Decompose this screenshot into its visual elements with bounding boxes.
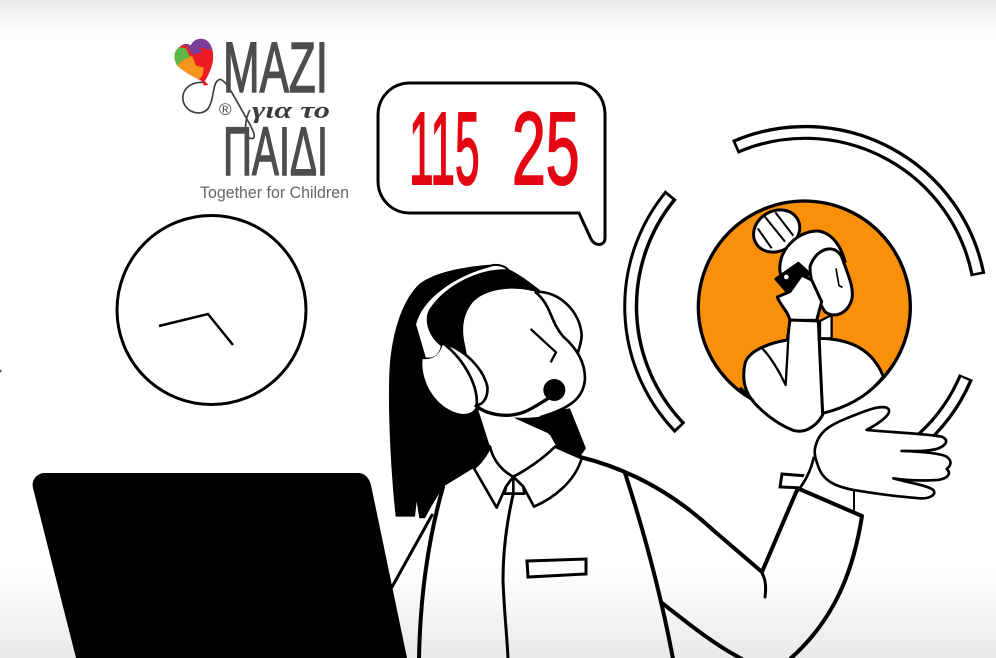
ring arc: top right <box>735 132 978 275</box>
far ear pad <box>537 292 582 354</box>
ring arc: left <box>631 195 680 428</box>
orange disc <box>698 201 910 413</box>
laptop <box>33 473 407 658</box>
caller torso <box>818 338 883 413</box>
agent outlines <box>392 457 797 658</box>
caller hand <box>777 275 822 320</box>
agent neck <box>478 410 555 477</box>
agent gesturing hand <box>796 407 950 657</box>
logo script: για το <box>252 98 330 124</box>
headset band <box>415 265 509 359</box>
logo tagline: Together for Children <box>200 184 349 202</box>
phone <box>776 263 809 295</box>
microphone boom <box>475 398 548 415</box>
helpline number: 25 <box>512 90 580 206</box>
caller eye <box>836 268 843 287</box>
call-centre agent <box>389 264 862 658</box>
caller arm <box>744 320 823 431</box>
watch strap <box>780 474 807 488</box>
caller hair bun <box>746 202 807 260</box>
ring arc: lower right <box>915 377 966 445</box>
agent hair <box>389 264 540 518</box>
shirt collar <box>474 447 582 508</box>
logo wordmark top: ΜΑΖΙ <box>223 29 328 108</box>
caller portrait on orange circle <box>698 201 910 431</box>
logo wordmark bottom: ΠΑΙΔΙ <box>223 113 328 190</box>
headset ear cup <box>422 343 477 414</box>
agent eye <box>531 329 556 362</box>
logo icon: puzzle heart balloon <box>170 35 254 139</box>
logo: Mazi gia to Paidi <box>170 29 349 202</box>
name badge <box>527 559 586 577</box>
caller face <box>810 249 852 315</box>
logo registered mark: ® <box>219 100 232 119</box>
caller hair <box>780 231 845 282</box>
helpline number: 115 <box>409 90 480 206</box>
agent face <box>463 289 585 418</box>
caller neck <box>820 315 832 338</box>
agent torso and arm <box>419 440 862 658</box>
microphone <box>543 379 565 401</box>
agent cuff and sleeve edge <box>790 488 862 658</box>
agent head with headset <box>389 264 586 518</box>
edge mark <box>0 370 2 372</box>
wall clock <box>117 216 306 404</box>
speech bubble with helpline number <box>378 83 605 245</box>
helpline number <box>409 90 580 206</box>
